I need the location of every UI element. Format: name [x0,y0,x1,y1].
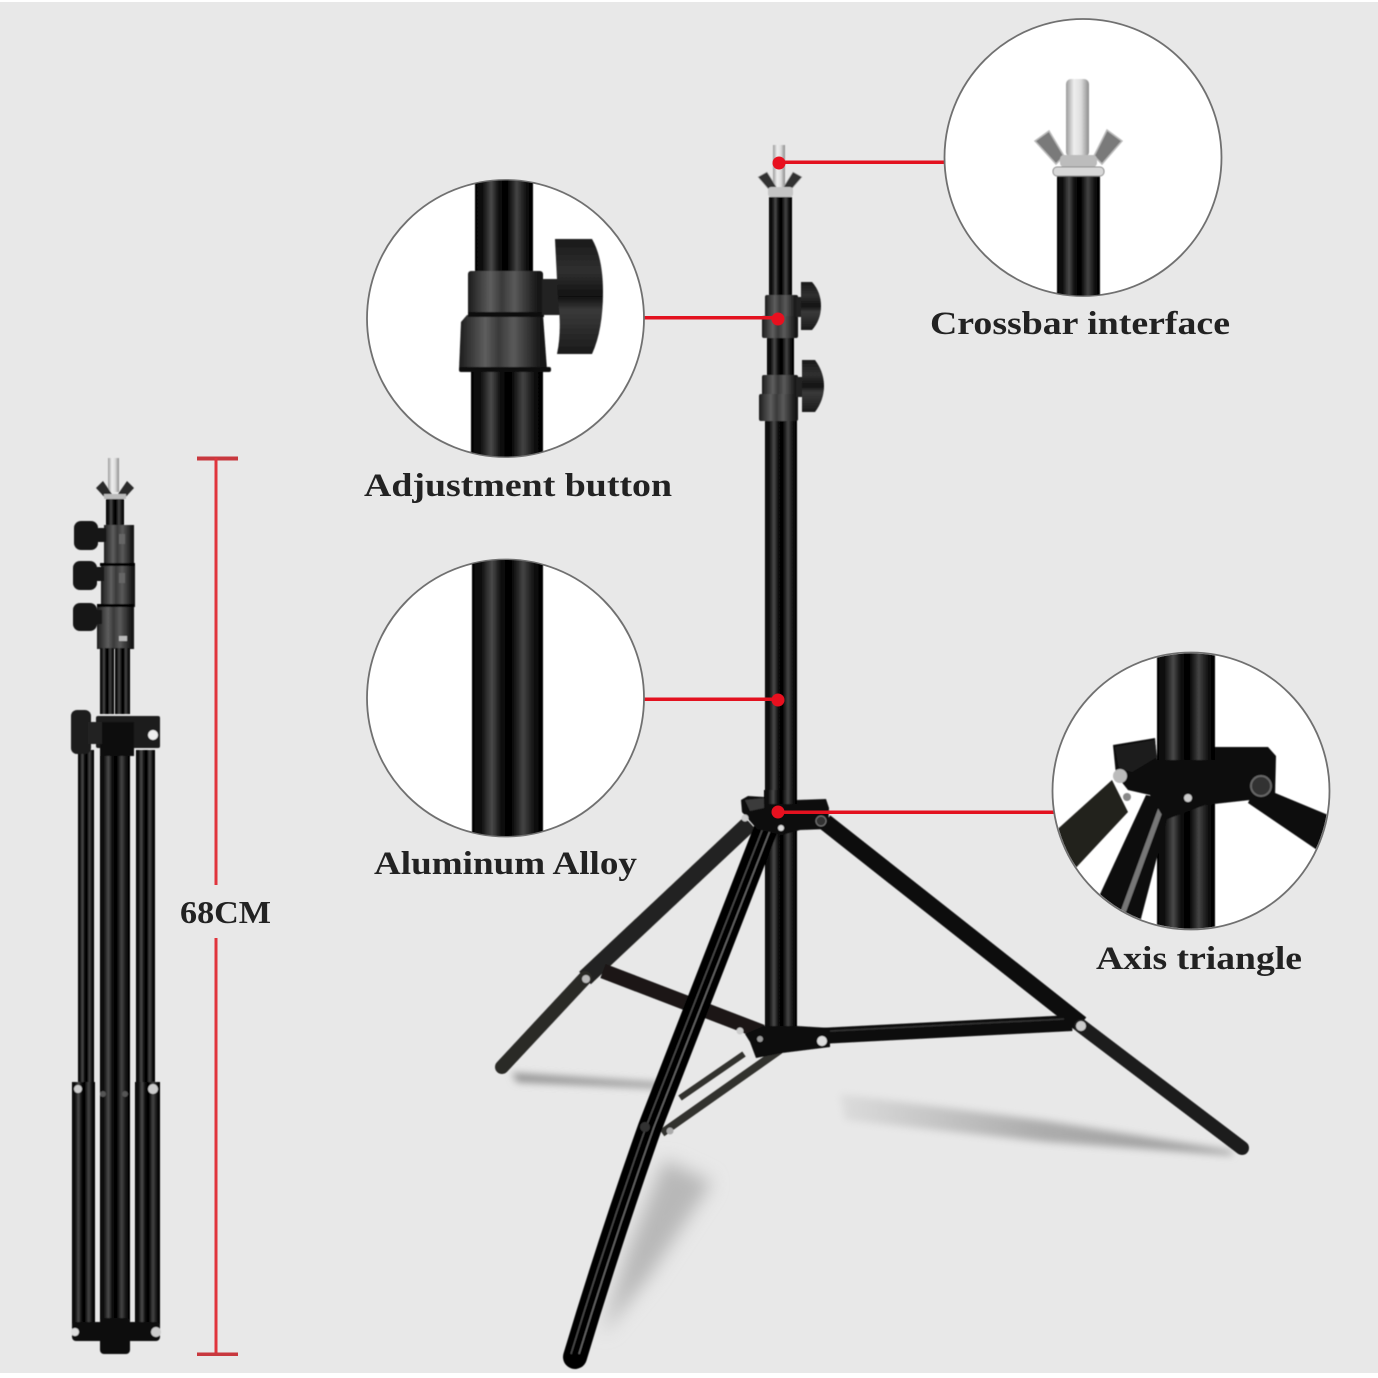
folded stand: legs [72,750,160,1330]
label: Adjustment button [364,468,672,504]
detail circle [367,555,644,840]
folded stand (left) [71,458,161,1354]
centre column [765,197,797,1032]
front leg [571,826,780,1357]
detail circle [1040,650,1340,935]
detail circle [367,175,644,463]
lower adjustment collar and knob [759,360,824,421]
label: Aluminum Alloy [374,846,638,882]
leader line [772,806,1054,818]
leader line [644,694,784,706]
callout: adjustment button [364,175,784,504]
callout: aluminum alloy [367,555,784,882]
floor shadows [512,1073,1232,1335]
upper adjustment collar and knob [762,282,821,338]
folded stand: threaded stud and wing nut [96,458,134,501]
leader line [644,312,784,326]
rear right leg [800,822,1242,1148]
folded stand: base [71,1318,161,1354]
main stand [502,145,1242,1357]
top stud and wing nut [758,145,802,197]
folded stand: hub and large knob [71,710,160,756]
lower hub [737,1026,830,1058]
folded stand: inner tubes [100,648,130,714]
callout: crossbar interface [772,19,1230,342]
folded stand: three knobs [73,521,106,631]
rear left leg [502,823,762,1067]
dimension label: 68CM [180,894,271,930]
axis triangle hub [741,790,829,835]
label: Axis triangle [1096,941,1302,977]
detail circle [944,19,1222,301]
callout: axis triangle [772,650,1340,977]
folded stand: locking collars [97,499,135,649]
label: Crossbar interface [930,306,1230,342]
dimension line: height [180,456,271,1356]
leader line [772,156,945,170]
